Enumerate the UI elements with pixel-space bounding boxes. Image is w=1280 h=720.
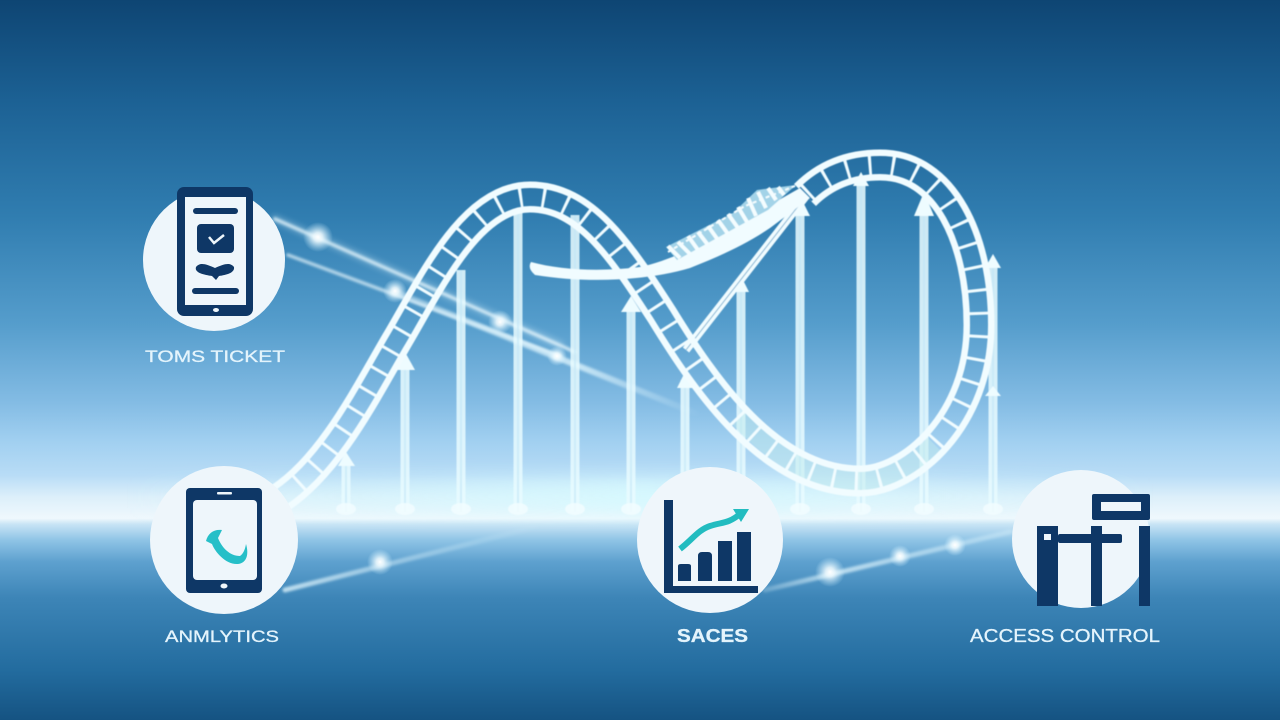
coaster train — [666, 185, 796, 260]
loop tail rail — [686, 196, 806, 350]
label: SACES — [677, 626, 748, 646]
label: TOMS TICKET — [145, 347, 285, 366]
label: ACCESS CONTROL — [970, 626, 1160, 646]
roller coaster — [280, 165, 1003, 515]
column feet — [336, 503, 1003, 515]
horizon glow — [0, 478, 1280, 514]
light flares — [303, 222, 966, 587]
icon circle — [143, 189, 285, 331]
icon: rising bar chart — [664, 500, 758, 593]
icon circle — [637, 467, 783, 613]
track ties — [280, 165, 979, 498]
icon circle — [150, 466, 298, 614]
panel: sales — [637, 467, 783, 646]
panel: analytics — [150, 466, 298, 646]
main track rails — [280, 165, 979, 498]
panel: mobile ticket — [143, 187, 285, 366]
label: ANMLYTICS — [165, 627, 279, 646]
upper crossing track — [530, 188, 810, 280]
icon: access gate — [1037, 494, 1150, 606]
teal wash in lower track — [740, 418, 935, 481]
support columns — [346, 180, 993, 512]
icon circle — [1012, 470, 1150, 608]
light streaks — [275, 219, 1010, 590]
panel: access control — [970, 470, 1160, 646]
column brackets — [338, 172, 1001, 466]
icon: tablet with swirl — [186, 488, 262, 593]
icon: smartphone ticket — [177, 187, 253, 316]
